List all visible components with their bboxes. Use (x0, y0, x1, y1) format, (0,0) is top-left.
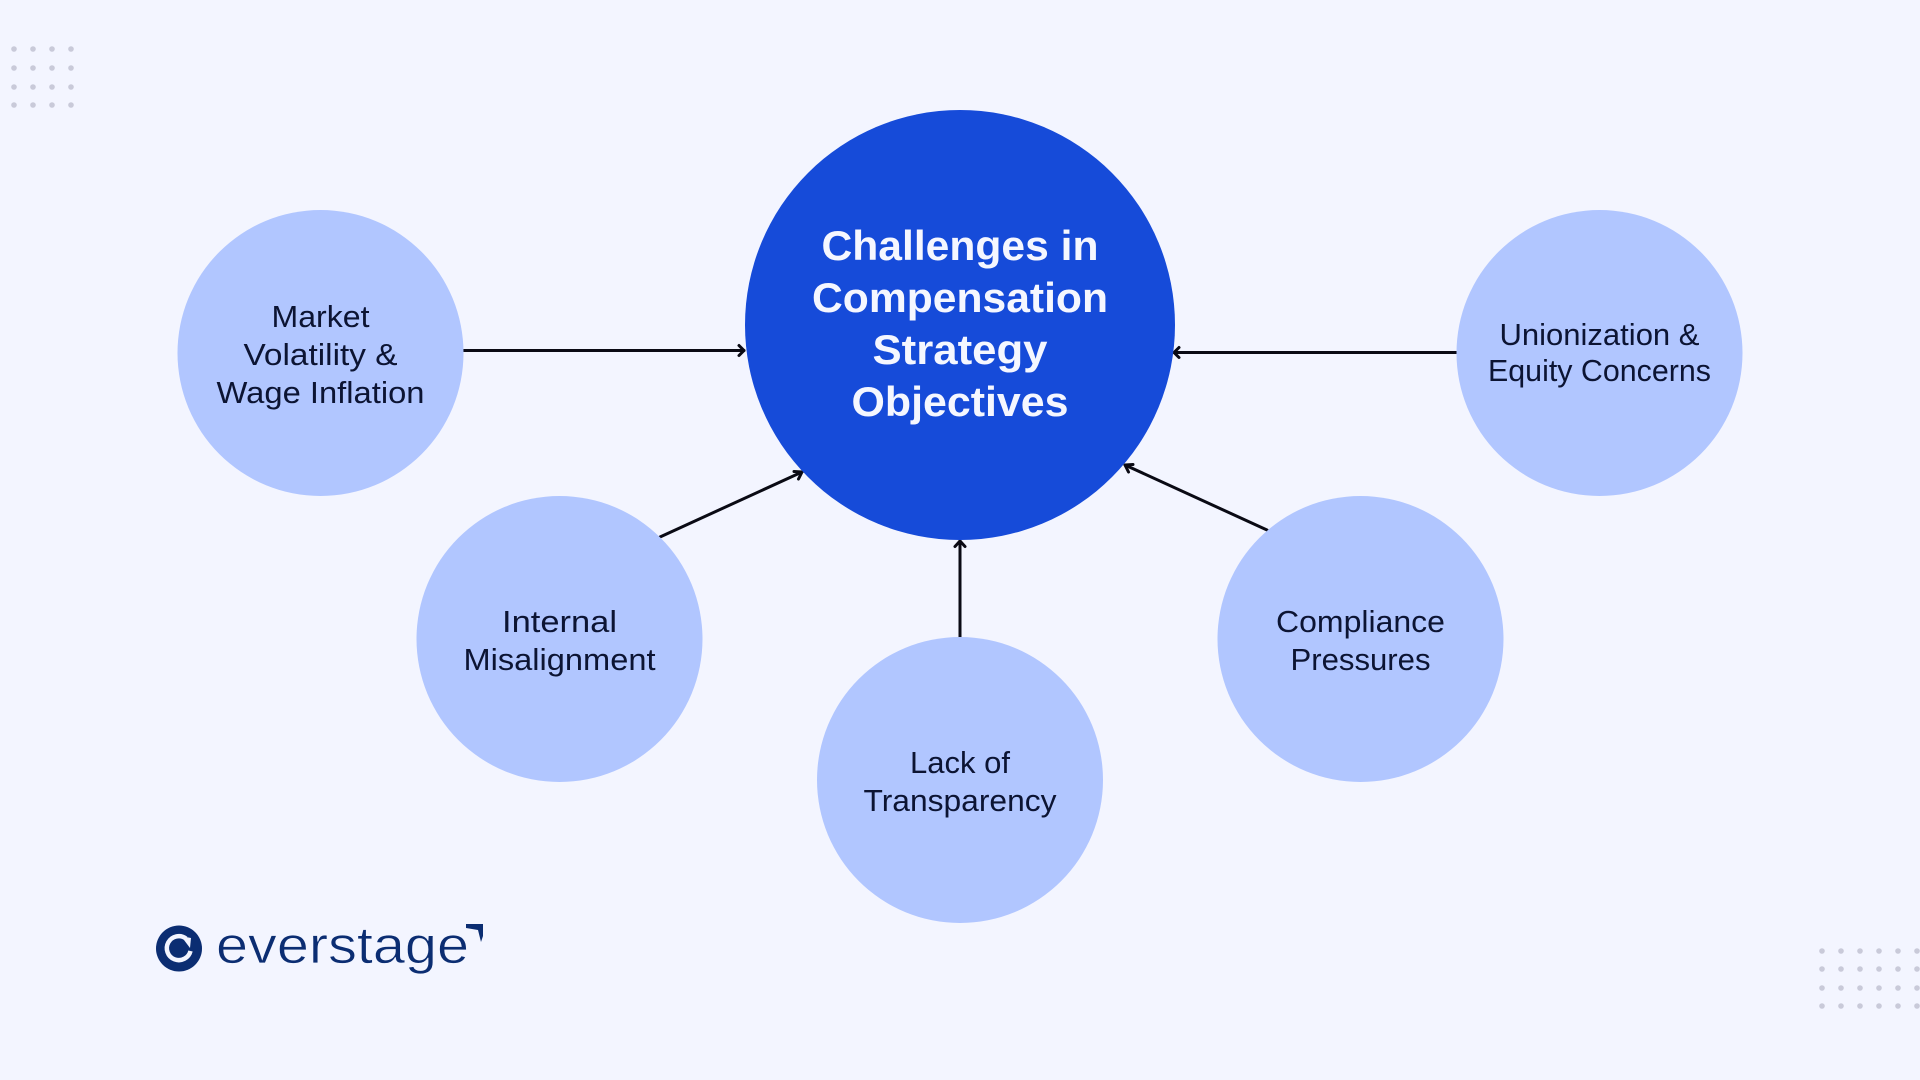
arrow: unionization to center (1174, 348, 1456, 358)
arrow: internal misalignment to center (660, 472, 802, 537)
circle: market volatility (178, 210, 464, 496)
arrow: compliance pressures to center (1125, 464, 1267, 530)
arrow: lack of transparency to center (955, 541, 965, 637)
circle: unionization (1456, 210, 1742, 496)
center circle: challenges title: Challenges in (822, 222, 1098, 269)
center circle: challenges title: Objectives (852, 378, 1068, 425)
circle: lack of transparency: Transparency (864, 783, 1057, 818)
circle: compliance pressures (1218, 496, 1504, 782)
circle: compliance pressures: Compliance (1276, 604, 1445, 639)
icon: logo corner mark (466, 924, 483, 942)
circle: market volatility: Market (272, 299, 370, 334)
circle: compliance pressures: Pressures (1290, 642, 1430, 677)
circle: market volatility: Wage Inflation (216, 375, 424, 410)
circle: internal misalignment: Misalignment (464, 642, 656, 677)
circle: market volatility: Volatility & (244, 337, 398, 372)
icon: logo mark (156, 926, 202, 972)
logo wordmark: everstage (216, 917, 469, 975)
center circle: challenges title: Strategy (872, 326, 1048, 373)
center circle: challenges title: Compensation (812, 274, 1108, 321)
dot pattern: top left (11, 46, 74, 108)
center circle: challenges title (745, 110, 1175, 540)
circle: unionization: Unionization & (1500, 317, 1700, 352)
dot pattern: bottom right (1819, 948, 1920, 1009)
circle: unionization: Equity Concerns (1488, 353, 1711, 388)
logo: everstage (156, 917, 483, 975)
circle: lack of transparency (817, 637, 1103, 923)
circle: internal misalignment: Internal (502, 604, 617, 639)
circle: internal misalignment (416, 496, 702, 782)
circle: lack of transparency: Lack of (910, 745, 1010, 780)
arrow: market volatility to center (464, 346, 744, 356)
